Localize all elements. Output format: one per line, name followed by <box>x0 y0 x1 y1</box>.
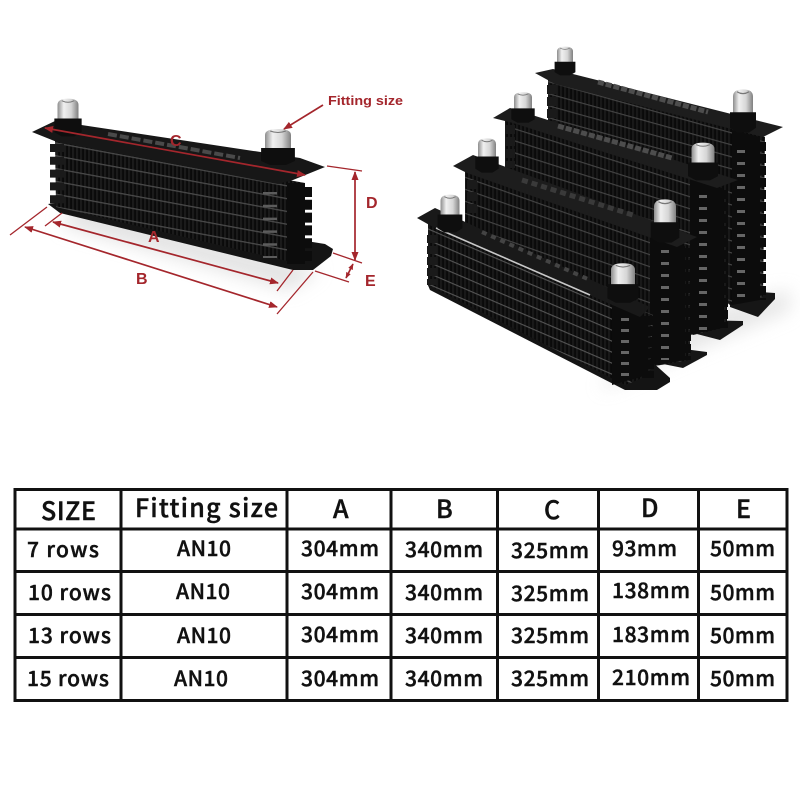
logo <box>558 126 672 158</box>
left cooler plate logo <box>108 134 240 158</box>
fitting size label: Fitting size <box>328 93 403 108</box>
fitting right <box>651 199 679 243</box>
row: 7 rows: 7 rows <box>27 534 99 564</box>
top plate <box>417 208 650 317</box>
fitting left <box>475 138 499 173</box>
body <box>548 78 765 305</box>
header row: SIZE <box>41 492 96 528</box>
fitting right <box>688 143 718 180</box>
row: 7 rows: 304mm <box>301 533 379 563</box>
left cooler body <box>55 138 305 264</box>
13 row cooler <box>493 92 743 340</box>
body <box>505 117 727 335</box>
label C: C <box>170 133 182 150</box>
size table <box>15 488 787 702</box>
header row: Fitting size <box>135 489 278 525</box>
top plate <box>453 155 697 247</box>
row: 15 rows: 50mm <box>710 663 775 693</box>
lobes highlight <box>621 318 629 378</box>
dimension E arrow <box>346 264 353 278</box>
header row: A <box>333 490 349 526</box>
row: 10 rows: AN10 <box>176 576 230 606</box>
row: 10 rows: 138mm <box>612 575 690 605</box>
row: 15 rows: 15 rows <box>27 663 109 693</box>
7 row front cooler <box>417 195 670 390</box>
fitting left <box>511 92 535 123</box>
row: 10 rows: 340mm <box>405 577 483 607</box>
dimension A arrow <box>53 222 278 283</box>
solid end <box>732 130 760 305</box>
fitting right <box>607 263 639 303</box>
left lobes <box>505 125 515 168</box>
lobes highlight <box>661 250 669 360</box>
left diagram: 7-row cooler with dimensions <box>10 93 403 314</box>
row: 13 rows: 50mm <box>710 620 775 650</box>
body <box>465 167 690 366</box>
row: 15 rows: AN10 <box>174 663 228 693</box>
header row: E <box>736 490 751 526</box>
row: 7 rows: AN10 <box>177 533 231 563</box>
left cooler left lobes <box>50 144 64 207</box>
label D: D <box>366 195 378 212</box>
top plate <box>493 108 738 188</box>
end lobes <box>642 316 654 378</box>
right photo: four stacked coolers <box>417 47 790 390</box>
lobes highlight <box>737 150 745 300</box>
row: 15 rows: 210mm <box>612 662 690 692</box>
row: 13 rows: 183mm <box>612 619 690 649</box>
row: 10 rows: 325mm <box>511 578 589 608</box>
left cooler foot plate <box>48 202 333 270</box>
foot <box>427 282 670 390</box>
row: 10 rows <box>28 575 775 608</box>
label B: B <box>136 271 148 288</box>
top plate <box>535 69 783 137</box>
row: 13 rows: 325mm <box>511 620 589 650</box>
row: 10 rows: 50mm <box>710 577 775 607</box>
row: 7 rows: 50mm <box>710 533 775 563</box>
header row: C <box>544 491 560 527</box>
body <box>428 222 653 385</box>
left cooler end lobes <box>287 183 305 264</box>
fitting left <box>555 47 575 75</box>
label A: A <box>148 229 160 246</box>
photo shadow <box>600 290 790 390</box>
row: 10 rows: 304mm <box>301 576 379 606</box>
row: 15 rows: 304mm <box>301 663 379 693</box>
row: 13 rows: 13 rows <box>28 620 111 650</box>
label E: E <box>365 273 376 290</box>
row: 13 rows: AN10 <box>177 620 231 650</box>
dimension D arrow <box>354 172 356 260</box>
end lobes <box>716 190 728 328</box>
fitting right <box>730 89 756 133</box>
solid end <box>690 178 722 335</box>
dimension extension lines <box>10 166 362 314</box>
left lobes <box>467 180 477 215</box>
row: 15 rows <box>27 662 775 693</box>
back cooler, 15 rows <box>535 47 783 317</box>
row: 7 rows: 340mm <box>405 534 483 564</box>
solid end <box>650 234 685 366</box>
row: 15 rows: 325mm <box>511 663 589 693</box>
left cooler shadow <box>60 200 320 290</box>
left fitting <box>54 99 82 136</box>
row: 13 rows: 340mm <box>405 620 483 650</box>
left lobes <box>547 85 557 125</box>
10 row cooler <box>453 138 707 368</box>
dimension B arrow <box>25 227 277 307</box>
header row <box>41 489 751 528</box>
left cooler top plate <box>32 121 325 184</box>
row: 7 rows: 93mm <box>612 533 677 563</box>
left cooler end lobes outer <box>296 187 312 262</box>
table grid <box>15 488 787 702</box>
left lobes <box>427 235 437 285</box>
header row: B <box>436 490 453 526</box>
plate highlight <box>436 228 590 295</box>
row: 10 rows: 10 rows <box>28 577 111 607</box>
fitting left <box>438 195 462 232</box>
end lobes <box>754 142 766 300</box>
row: 7 rows <box>27 533 775 565</box>
solid end <box>612 305 648 385</box>
foot <box>693 320 743 340</box>
right fitting <box>261 129 295 165</box>
row: 13 rows <box>28 619 775 650</box>
row: 13 rows: 304mm <box>301 619 379 649</box>
lobes highlight <box>699 195 707 330</box>
foot <box>653 345 707 368</box>
foot <box>730 290 775 317</box>
fitting size arrow <box>284 105 323 129</box>
dimension C arrow <box>45 128 305 175</box>
logo <box>598 82 708 112</box>
logo <box>482 232 590 280</box>
left cooler lobes highlight <box>263 192 277 258</box>
header row: D <box>641 489 658 525</box>
end lobes <box>679 248 691 360</box>
logo <box>522 180 636 216</box>
row: 7 rows: 325mm <box>511 535 589 565</box>
row: 15 rows: 340mm <box>405 663 483 693</box>
